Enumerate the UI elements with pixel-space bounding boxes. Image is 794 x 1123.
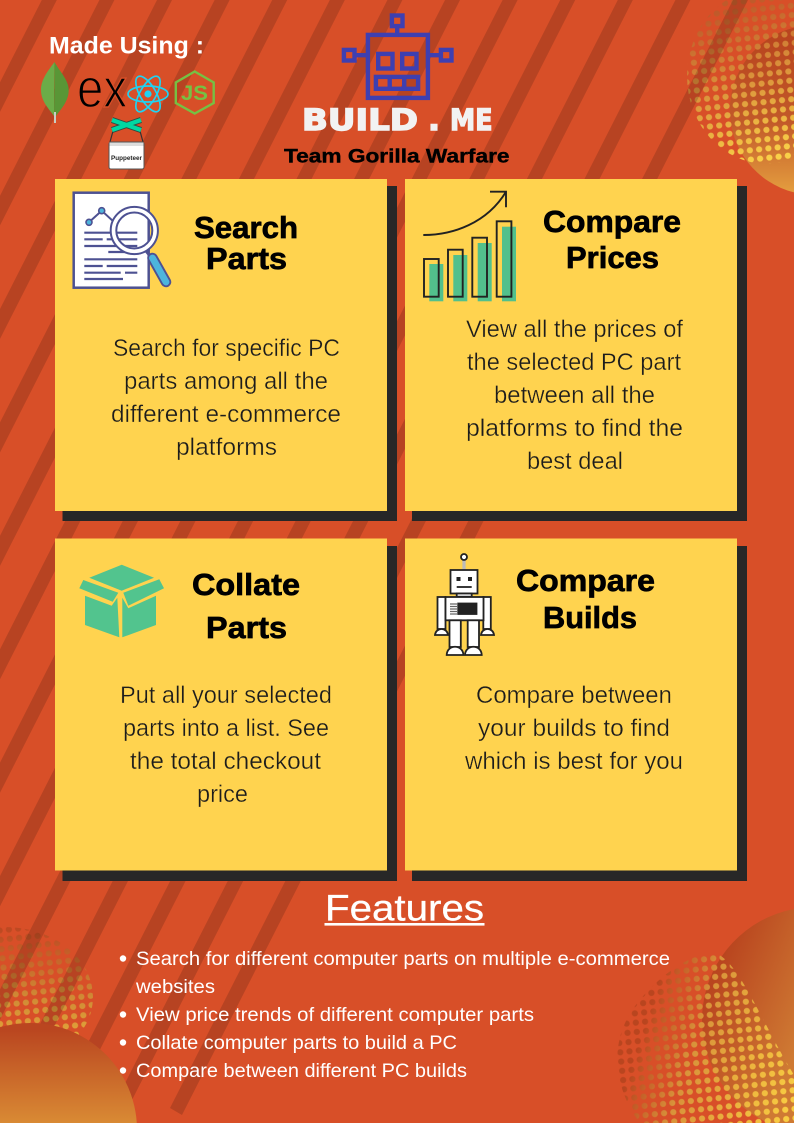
heading: Compare: [543, 204, 681, 239]
features list: Search for different computer parts on multiple e-commerce: [136, 948, 670, 970]
logo: wordmark: .: [428, 103, 440, 137]
description: [111, 335, 341, 461]
made using heading: Made Using :: [49, 32, 204, 60]
team name: Team Gorilla Warfare: [284, 145, 510, 167]
heading: Search: [194, 210, 298, 245]
description: parts into a list. See: [123, 715, 329, 742]
decoration: top right gradient blob: [730, 28, 794, 192]
decoration: bottom right gradient blob: [702, 909, 794, 1123]
panel: search parts: [55, 179, 397, 521]
icon: rising bar chart: [423, 192, 516, 301]
description: Put all your selected: [120, 682, 332, 709]
description: [120, 682, 332, 808]
description: the total checkout: [130, 748, 321, 775]
description: platforms to find the: [466, 415, 683, 442]
heading: Parts: [206, 610, 287, 645]
decoration: bottom left halftone: [0, 927, 93, 1035]
heading: Parts: [206, 241, 287, 276]
features heading: Features: [325, 888, 484, 928]
description: price: [197, 781, 248, 808]
description: parts among all the: [124, 368, 328, 395]
heading: Compare: [516, 563, 655, 598]
heading: [194, 210, 298, 276]
icon: node js logo: [176, 72, 214, 114]
description: Compare between: [476, 682, 672, 709]
icon: mongodb leaf: [41, 62, 69, 123]
panel: compare builds: [405, 538, 747, 881]
decoration: bottom right halftone: [618, 955, 794, 1123]
features list: Compare between different PC builds: [136, 1060, 467, 1082]
description: which is best for you: [464, 748, 683, 775]
description: best deal: [527, 448, 623, 475]
logo: wordmark: [302, 103, 492, 137]
icon: open box: [79, 565, 164, 637]
description: [464, 682, 683, 775]
features list: Collate computer parts to build a PC: [136, 1032, 457, 1054]
heading: [192, 567, 300, 645]
description: Search for specific PC: [113, 335, 340, 362]
description: different e-commerce: [111, 401, 341, 428]
decoration: bottom left gradient blob: [0, 1023, 137, 1123]
heading: [543, 204, 681, 275]
heading: [516, 563, 655, 635]
description: [466, 316, 683, 475]
description: your builds to find: [478, 715, 670, 742]
icon: react logo: [128, 73, 168, 115]
decoration: top right halftone: [680, 0, 794, 170]
icon: puppeteer logo: [109, 120, 144, 169]
features list: websites: [135, 976, 215, 998]
icon: document with magnifier: [74, 193, 166, 288]
icon: node js logo: JS: [181, 82, 208, 105]
heading: Builds: [543, 600, 637, 635]
logo: robot head: [344, 16, 452, 98]
description: platforms: [176, 434, 277, 461]
features list: [120, 948, 670, 1082]
icon: express logo: ex: [77, 57, 127, 119]
description: the selected PC part: [467, 349, 681, 376]
icon: puppeteer logo: Puppeteer: [111, 155, 142, 162]
features list: View price trends of different computer parts: [136, 1004, 534, 1026]
heading: Prices: [566, 240, 659, 275]
panel: compare prices: [405, 179, 747, 521]
heading: Collate: [192, 567, 300, 602]
description: View all the prices of: [466, 316, 683, 343]
logo: wordmark: ME: [450, 103, 492, 137]
panel: collate parts: [55, 538, 397, 881]
icon: robot: [435, 554, 494, 655]
logo: wordmark: BUILD: [302, 103, 418, 137]
description: between all the: [494, 382, 655, 409]
